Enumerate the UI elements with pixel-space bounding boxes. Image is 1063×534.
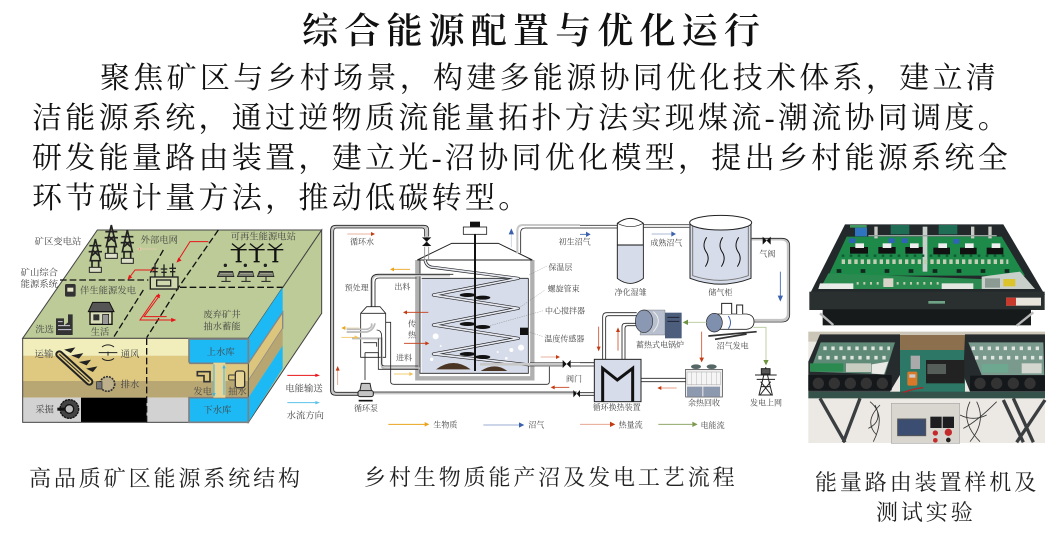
- side pipe fragment: [331, 227, 340, 395]
- labels: 下水库: [203, 404, 231, 416]
- labels: 中心搅拌器: [545, 305, 585, 315]
- labels: 能源系统: [21, 278, 59, 290]
- labels: 保温层: [548, 263, 572, 272]
- labels: 洗选: [35, 323, 54, 335]
- photo: test bench: [808, 332, 1045, 443]
- labels: 预处理: [345, 283, 369, 293]
- labels: 循环泵: [354, 403, 378, 413]
- temperature sensor: [520, 328, 543, 337]
- labels: 出料: [394, 281, 410, 291]
- labels: 热: [408, 329, 417, 339]
- right side face: [248, 230, 322, 422]
- gas holder: [643, 215, 752, 284]
- legend: heat and electricity: [580, 419, 725, 430]
- labels: 通风: [121, 349, 140, 360]
- heat exchanger: [594, 359, 641, 402]
- labels: 废弃矿井: [203, 309, 241, 321]
- labels: 传: [408, 319, 416, 329]
- labels: 沼气发电: [717, 341, 749, 351]
- labels: 净化湿雏: [615, 287, 647, 297]
- legend: arrows: [285, 374, 324, 421]
- labels: 抽水: [228, 385, 247, 397]
- labels: 气阀: [759, 249, 775, 259]
- labels: [345, 237, 591, 413]
- legend: heat and electricity: 热量流: [619, 419, 643, 429]
- valve on circulating water: [422, 237, 431, 246]
- labels: 余热回收: [688, 398, 720, 408]
- labels: 抽水蓄能: [203, 321, 241, 333]
- flow arrows: [580, 231, 783, 390]
- labels: [21, 231, 296, 416]
- feed and discharge pipes with pretreatment unit: [347, 274, 549, 384]
- dashed zone lines: [60, 230, 283, 422]
- front face strata: [23, 338, 248, 422]
- labels: 生活: [91, 326, 109, 338]
- transmission towers: [89, 225, 134, 272]
- circulating water pipes: [331, 225, 577, 395]
- purification tower: [580, 218, 643, 283]
- circulating pump: [358, 383, 373, 401]
- labels: 温度传感器: [544, 333, 584, 343]
- wind turbines and solar panels: [217, 244, 283, 281]
- caption: router prototype: 测试实验: [876, 500, 976, 525]
- legend: heat and electricity: 电能流: [701, 420, 725, 430]
- substation transformer: [150, 263, 178, 289]
- labels: 进料: [396, 353, 412, 363]
- labels: 运输: [35, 348, 53, 360]
- caption: biogas process: 乡村生物质能产沼及发电工艺流程: [364, 465, 738, 490]
- caption: router prototype: [815, 470, 1039, 525]
- waste heat recovery: [686, 364, 722, 397]
- gas pipe from digester: [517, 225, 580, 253]
- labels: 外部电网: [141, 234, 178, 246]
- labels: 发电上网: [750, 397, 782, 407]
- stirrer shaft and motor: [460, 222, 490, 371]
- labels: 排水: [121, 378, 140, 390]
- text block: summary paragraph: [32, 62, 1011, 215]
- labels: 储气柜: [708, 287, 732, 297]
- text block: summary paragraph: 研发能量路由装置，建立光-沼协同优化模型，提出乡村能源系统全: [32, 142, 1011, 175]
- labels: 阀门: [566, 373, 582, 383]
- labels: 蓄热式电锅炉: [636, 340, 684, 350]
- labels: 采掘: [35, 403, 54, 415]
- labels: 发电: [193, 385, 212, 397]
- labels: 伴生能源发电: [80, 285, 136, 297]
- red power arrows: [128, 242, 208, 321]
- leader lines: [490, 266, 547, 326]
- spiral coil: [425, 260, 530, 365]
- legend: biomass and biogas: [388, 419, 544, 429]
- legend: arrows: 电能输送: [285, 383, 323, 395]
- labels: [593, 237, 782, 412]
- labels: 螺旋管束: [548, 284, 580, 294]
- labels: 循环水: [350, 237, 374, 247]
- labels: 初生沼气: [559, 237, 591, 247]
- labels: 循环换热装置: [593, 402, 641, 412]
- labels: 成熟沼气: [650, 237, 682, 247]
- panel: energy router prototype photos: [808, 224, 1046, 444]
- caption: router prototype: 能量路由装置样机及: [815, 470, 1039, 495]
- biomass piles and bubbles: [430, 333, 524, 371]
- biogas generator: [706, 303, 757, 339]
- legend: arrows: 水流方向: [287, 409, 324, 421]
- gas pipe and gas valve: [752, 237, 790, 322]
- text block: summary paragraph: 洁能源系统，通过逆物质流能量拓扑方法实现煤流-潮流协同调度。: [32, 102, 1011, 135]
- panel: biogas process flow, power side: [580, 214, 790, 430]
- output pipe and valves: [480, 360, 580, 397]
- labels: 可再生能源电站: [231, 231, 296, 243]
- labels: 上水库: [207, 346, 235, 358]
- text block: summary paragraph: 环节碳计量方法，推动低碳转型。: [32, 182, 532, 215]
- legend: biomass and biogas: 沼气: [528, 419, 544, 429]
- electric boiler: [635, 310, 682, 338]
- conveyor, ventilation, drainage, mining icons: [57, 345, 117, 418]
- legend: biomass and biogas: 生物质: [433, 419, 457, 429]
- digester tank: [417, 243, 532, 378]
- pumped storage icons and water flow: [197, 364, 245, 397]
- grid tower: [755, 367, 777, 395]
- panel: biogas process flow, digester side: [330, 222, 591, 429]
- hot water pipes to heat exchanger: [580, 313, 686, 395]
- text block: summary paragraph: 聚焦矿区与乡村场景，构建多能源协同优化技术体系，建立清: [100, 62, 999, 95]
- panel: mine energy system block diagram: [20, 224, 334, 424]
- labels: 矿区变电站: [35, 235, 81, 247]
- flow arrows: [336, 228, 569, 389]
- top face: [23, 230, 322, 338]
- caption: mine energy system: 高品质矿区能源系统结构: [29, 466, 303, 491]
- upper and lower reservoirs: [189, 339, 248, 422]
- photo: router chassis: [809, 224, 1045, 326]
- labels: 矿山综合: [21, 267, 59, 279]
- title: 综合能源配置与优化运行: [302, 11, 766, 51]
- icons: biomass, house, factory: [56, 284, 114, 335]
